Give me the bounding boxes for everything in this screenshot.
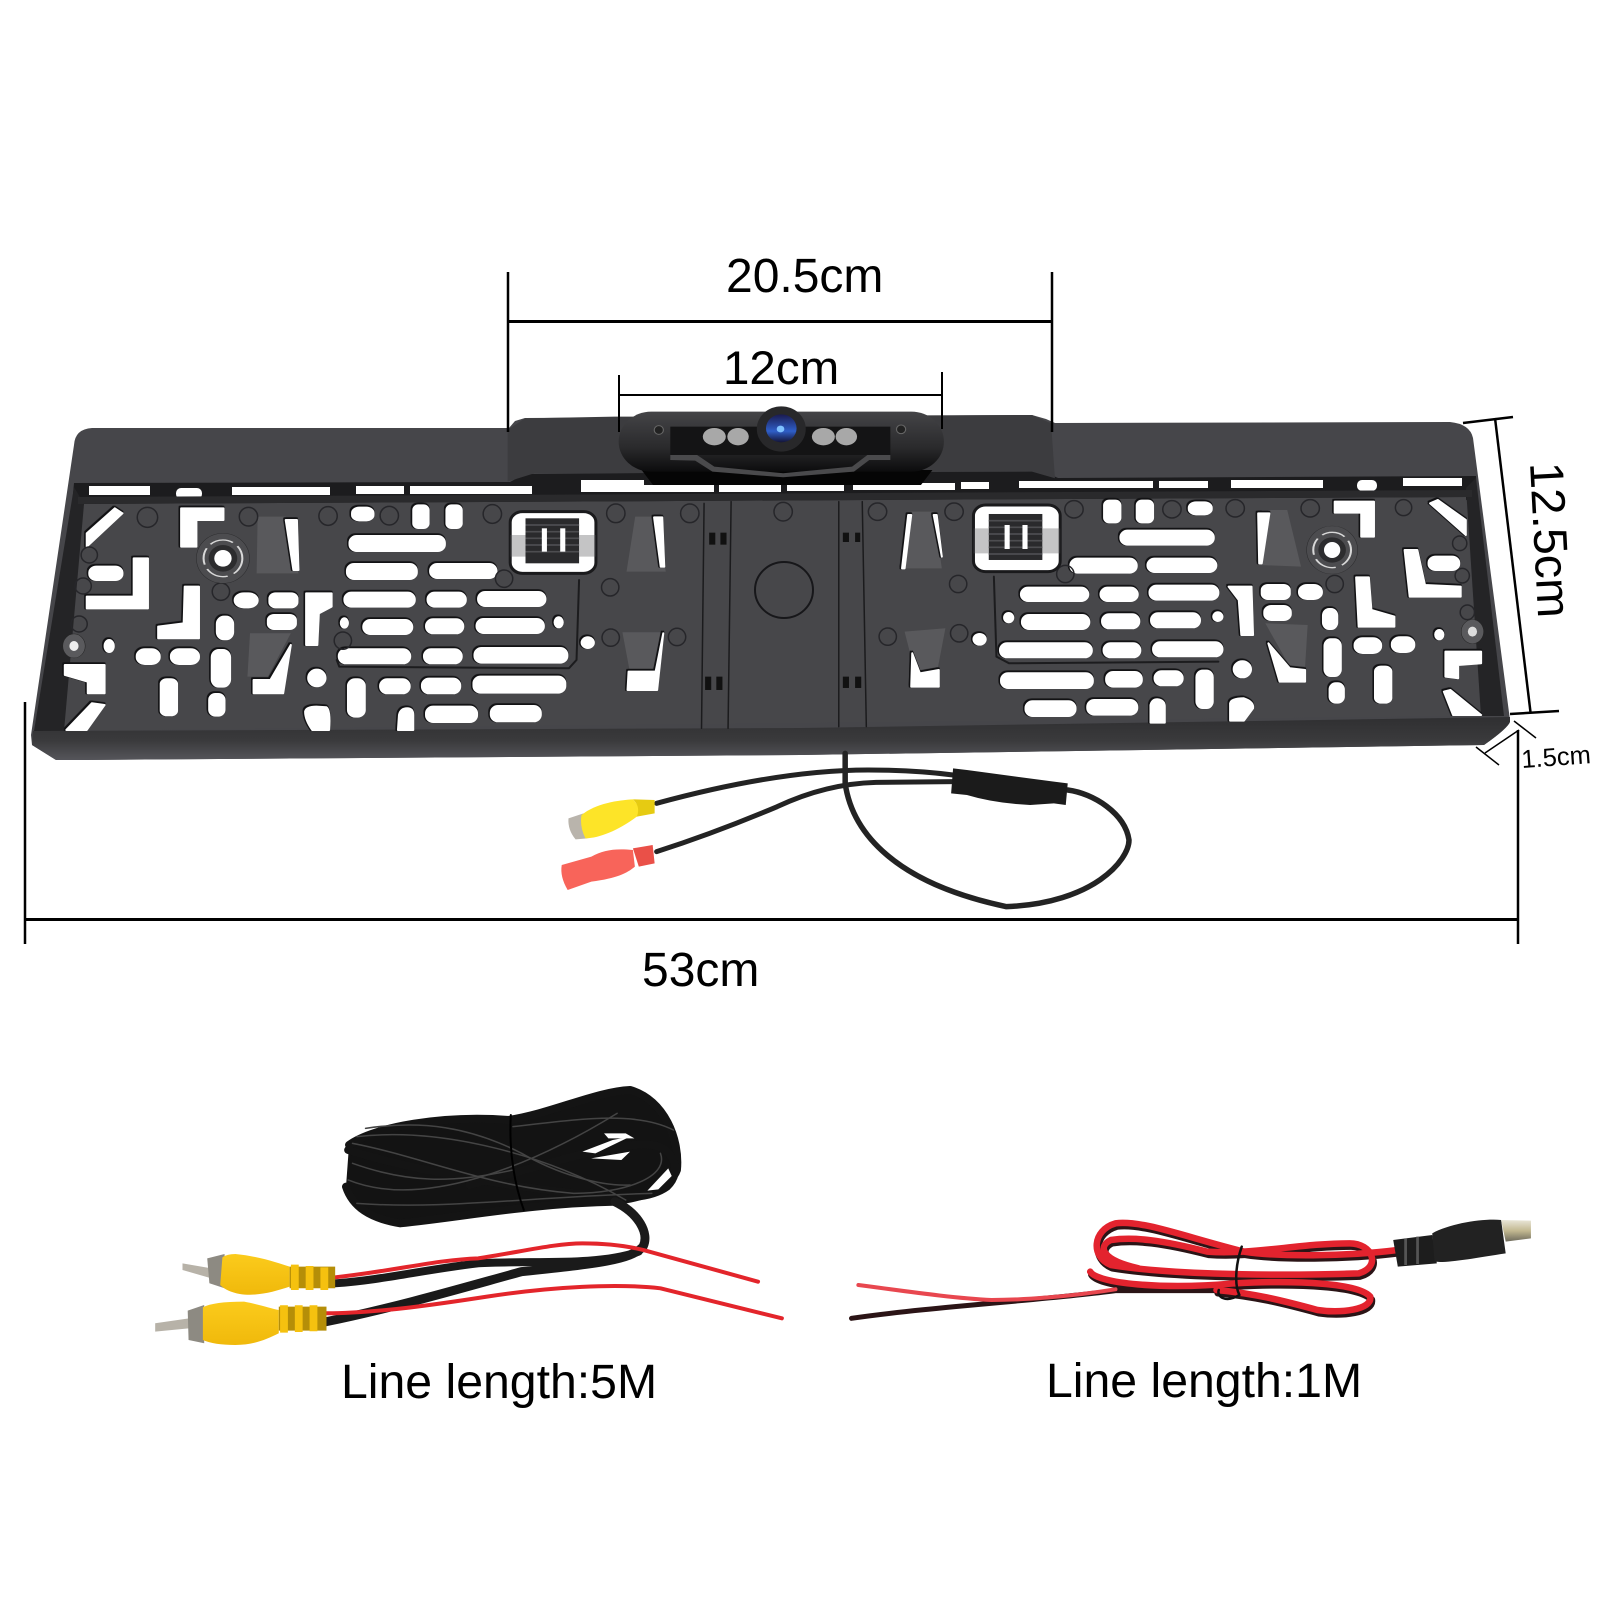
cables [657, 753, 1129, 907]
tie [1218, 1247, 1242, 1299]
upper RCA plug [183, 1254, 335, 1295]
small marks [843, 533, 861, 688]
centre section lines [702, 502, 731, 728]
plate panel [64, 497, 1481, 731]
chin highlight [670, 455, 890, 477]
dimension: 20.5cm: 20.5cm [726, 250, 883, 303]
top rail line [78, 490, 1472, 504]
frame body [31, 415, 1510, 760]
slots and holes [902, 500, 1481, 723]
centre section lines [839, 502, 866, 727]
red coil [1090, 1223, 1398, 1311]
plate right half [839, 500, 1484, 727]
lens [757, 406, 806, 452]
top band shadow edge [72, 470, 1476, 505]
grommet [1461, 620, 1484, 644]
LED strip [670, 427, 890, 455]
small marks [705, 533, 727, 690]
tie [510, 1115, 524, 1210]
black under-wire [1092, 1226, 1399, 1314]
grommet [63, 634, 85, 658]
black tail [851, 1291, 1216, 1318]
right dark lip [1466, 478, 1504, 716]
locator circles [71, 502, 792, 649]
5M video cable [155, 1090, 782, 1345]
wedges [902, 510, 1308, 672]
plate left half [63, 502, 792, 730]
LEDs [703, 428, 857, 445]
coil gaps [582, 1133, 672, 1191]
DC plug [1393, 1220, 1531, 1267]
top row slots [89, 478, 1462, 499]
screws [654, 425, 906, 434]
dimension: 53cm: 53cm [642, 944, 759, 997]
raised outline [994, 577, 1218, 663]
dimension: 12.5cm: 12.5cm [1519, 461, 1580, 619]
coil highlights [348, 1113, 673, 1205]
dimension: 12cm: 12cm [723, 342, 839, 395]
centre circle [755, 562, 813, 618]
inline connector [951, 768, 1068, 805]
under shadow [642, 470, 932, 485]
raised outline [337, 580, 579, 668]
licence plate frame [31, 415, 1510, 760]
license clip [510, 512, 596, 573]
lower RCA plug [155, 1302, 326, 1345]
dimension: 12.5cm [1463, 417, 1580, 714]
slots and holes [65, 505, 664, 730]
label: 1M line length: Line length:1M [1046, 1354, 1362, 1408]
mounting ring [1307, 526, 1358, 574]
label: 5M line length: Line length:5M [341, 1355, 657, 1409]
black cores [326, 1202, 645, 1322]
coil base [346, 1090, 677, 1223]
coil strands [346, 1090, 677, 1223]
red wires [326, 1243, 782, 1318]
camera lead with RCA plugs [561, 753, 1129, 907]
red plug [561, 845, 655, 890]
reversing camera [508, 406, 1055, 485]
1M power cable [851, 1220, 1531, 1318]
mounting ring [196, 533, 249, 583]
camera body [619, 412, 944, 472]
left dark lip [34, 487, 84, 731]
locator circles [868, 500, 1474, 645]
wedges [247, 517, 666, 677]
dimension: 1.5cm: 1.5cm [1520, 741, 1592, 774]
license clip [973, 505, 1060, 572]
camera housing [508, 415, 1055, 482]
red tail [858, 1285, 1115, 1300]
lower edge strip [32, 717, 1510, 760]
yellow plug [568, 799, 655, 839]
dimension: 1.5cm [1476, 721, 1592, 774]
